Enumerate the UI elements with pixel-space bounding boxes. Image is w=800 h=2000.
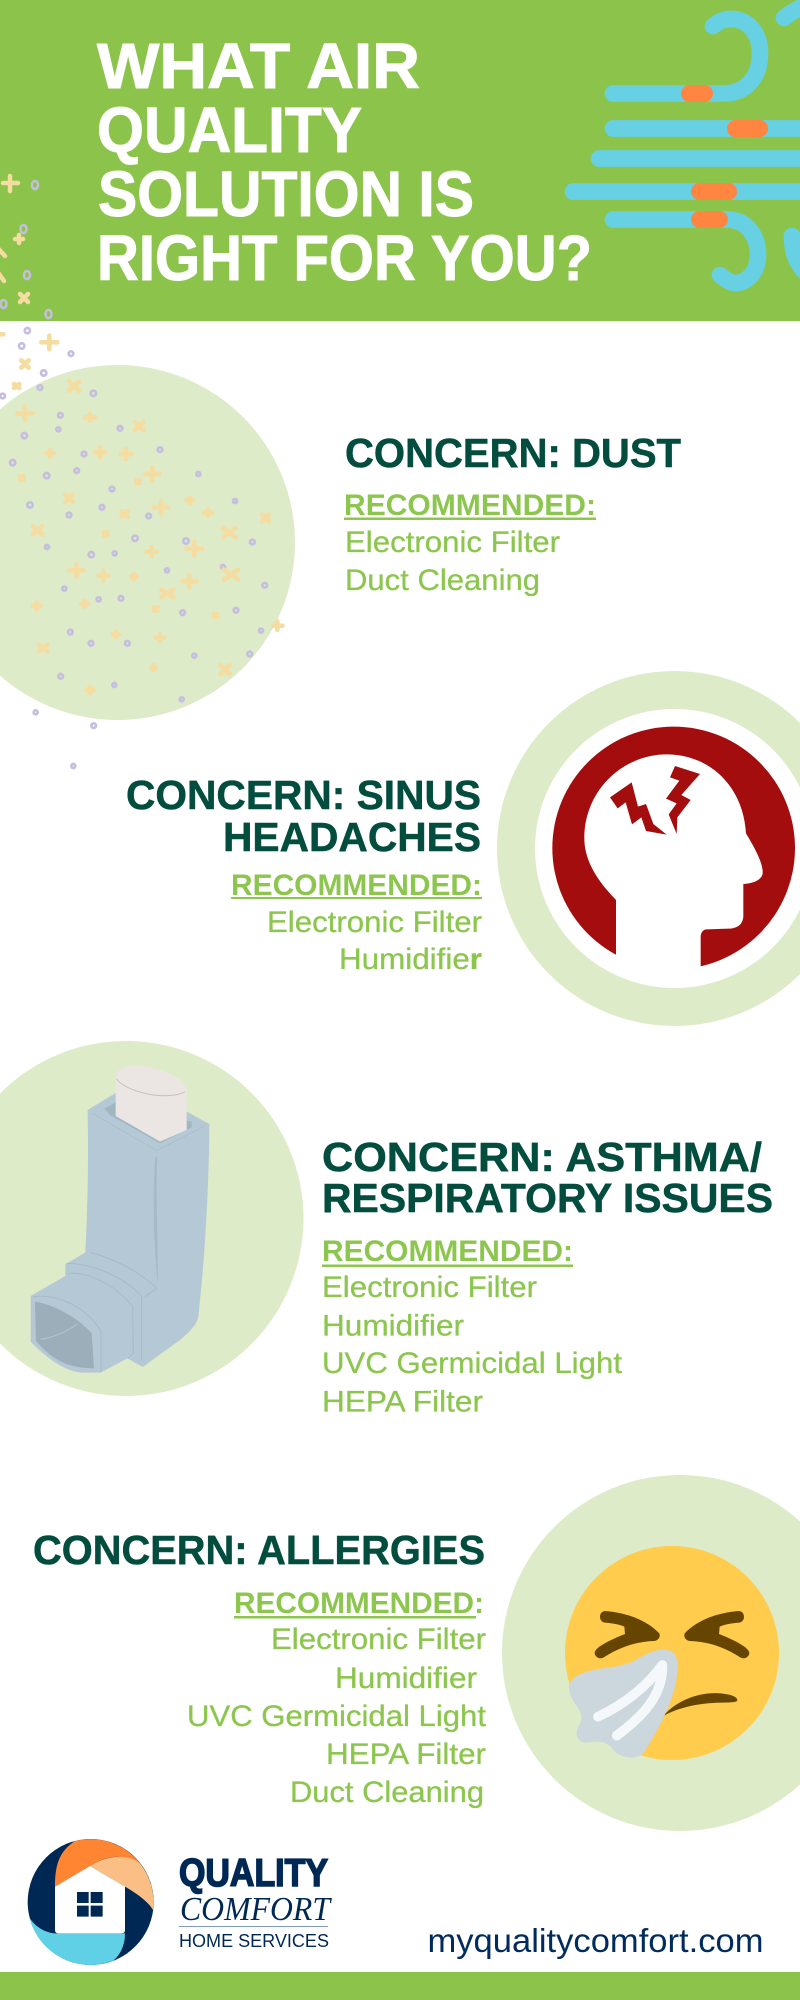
text block: concern dust: Electronic Filter xyxy=(345,526,560,559)
text block: concern asthma: Humidifier xyxy=(322,1310,464,1342)
text block: concern asthma: UVC Germicidal Light xyxy=(322,1347,623,1380)
text block: concern dust xyxy=(344,430,681,597)
logo: quality comfort xyxy=(28,1839,332,1965)
text block: concern asthma: CONCERN: ASTHMA/ xyxy=(322,1134,762,1180)
logo wordmark: COMFORT xyxy=(180,1891,332,1928)
panel: dust circle with particles xyxy=(0,328,295,768)
text block: concern asthma xyxy=(322,1134,773,1418)
text block: concern allergies: Duct Cleaning xyxy=(290,1776,484,1809)
text block: concern allergies: UVC Germicidal Light xyxy=(187,1700,487,1733)
text block: concern sinus headaches: HEADACHES xyxy=(223,814,481,860)
text block: concern allergies: CONCERN: ALLERGIES xyxy=(33,1527,485,1573)
text block: concern allergies: Electronic Filter xyxy=(271,1623,486,1656)
title: QUALITY xyxy=(97,94,362,166)
text block: concern sinus headaches xyxy=(126,772,482,976)
logo wordmark: HOME SERVICES xyxy=(179,1931,329,1951)
text block: concern dust: RECOMMENDED: xyxy=(344,489,596,522)
text block: concern sinus headaches: Electronic Filter xyxy=(267,906,482,939)
text block: concern allergies: Humidifier xyxy=(335,1662,477,1695)
logo wordmark xyxy=(179,1852,332,1951)
icon: wind xyxy=(573,5,800,283)
title: RIGHT FOR YOU? xyxy=(97,222,592,294)
text block: concern asthma: Electronic Filter xyxy=(322,1271,537,1304)
panel: sinus headache circle xyxy=(497,671,800,1026)
text block: concern allergies: RECOMMENDED: xyxy=(234,1587,484,1620)
icon: sneezing face xyxy=(565,1546,779,1760)
icon: dust particles xyxy=(0,328,282,768)
title: WHAT AIR xyxy=(97,30,420,102)
text block: concern asthma: RECOMMENDED: xyxy=(322,1235,573,1268)
text block: concern sinus headaches: CONCERN: SINUS xyxy=(126,772,481,818)
text block: concern sinus headaches: RECOMMENDED: xyxy=(231,869,482,902)
text block: concern asthma: RESPIRATORY ISSUES xyxy=(322,1175,773,1221)
website address: myqualitycomfort.com xyxy=(428,1922,764,1959)
footer band xyxy=(0,1972,800,2000)
text block: concern allergies xyxy=(33,1527,487,1809)
text block: concern sinus headaches: Humidifier xyxy=(339,943,482,976)
icon: house emblem xyxy=(28,1839,154,1965)
title xyxy=(97,30,592,294)
logo wordmark: QUALITY xyxy=(179,1852,328,1895)
panel: asthma circle xyxy=(0,1041,304,1396)
title: SOLUTION IS xyxy=(98,158,474,230)
icon: head with pain bolts xyxy=(552,727,795,972)
text block: concern asthma: HEPA Filter xyxy=(322,1386,483,1418)
header band xyxy=(0,0,800,321)
panel: allergies circle xyxy=(502,1475,800,1831)
header sparkles xyxy=(0,176,52,318)
text block: concern dust: CONCERN: DUST xyxy=(345,430,681,476)
icon: inhaler xyxy=(31,1065,209,1373)
text block: concern allergies: HEPA Filter xyxy=(326,1738,486,1771)
text block: concern dust: Duct Cleaning xyxy=(345,564,540,597)
